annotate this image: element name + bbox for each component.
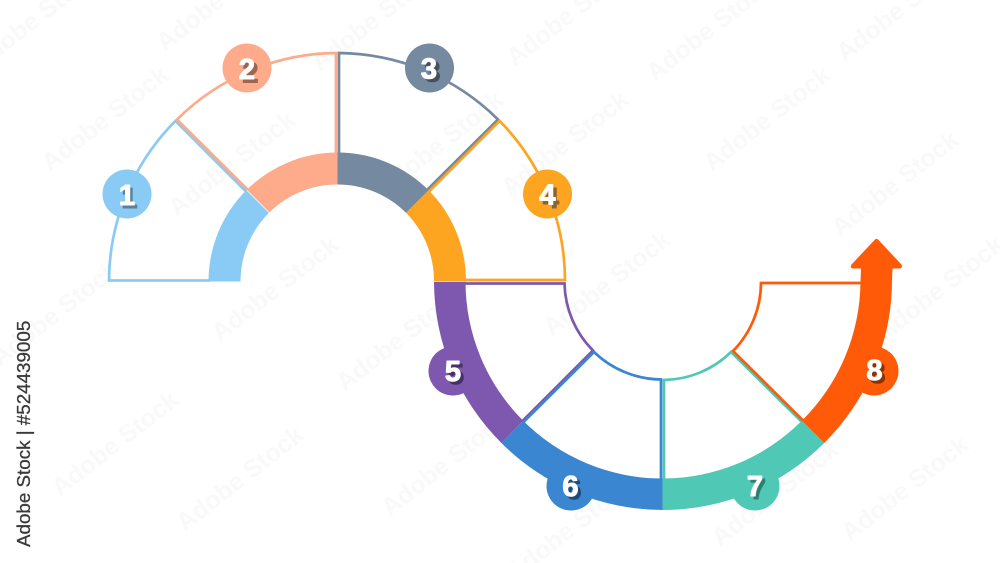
text: Adobe Stock (496, 86, 634, 202)
band segment 7 (662, 421, 824, 510)
band segment 3 (338, 152, 429, 213)
text: Adobe Stock (698, 61, 836, 177)
text: Adobe Stock (206, 231, 344, 347)
band segment 8 with arrow (802, 239, 902, 443)
badge 1: 1 (119, 180, 135, 212)
number 5: 5 (445, 356, 461, 388)
panel outline 1 (109, 121, 246, 281)
text: Adobe Stock (826, 126, 964, 242)
badge 1: 1 (121, 183, 138, 215)
badge 2 (222, 44, 272, 92)
number 6: 6 (562, 471, 579, 503)
text: Adobe Stock (376, 406, 514, 522)
number 8: 8 (866, 355, 883, 387)
text: Adobe Stock (36, 61, 174, 177)
text: Adobe Stock (171, 421, 309, 537)
band segment 4 (406, 190, 466, 282)
number 7: 7 (750, 474, 766, 506)
text: Adobe Stock (706, 436, 844, 552)
badge 4: 4 (539, 180, 556, 212)
stock id text: Adobe Stock | #524439005 (13, 321, 34, 547)
text: Adobe Stock (836, 431, 974, 547)
text: Adobe Stock (538, 226, 676, 342)
band segment 5 (434, 282, 523, 443)
badge 4: 4 (543, 183, 559, 215)
band segment 1 (208, 190, 269, 282)
text: Adobe Stock (163, 106, 301, 222)
text: Adobe Stock (331, 281, 469, 397)
band segment 6 (501, 421, 662, 510)
number 5: 5 (448, 359, 464, 391)
panel outline 4 (429, 121, 565, 280)
panel outline 6 (524, 352, 661, 480)
panel outline 7 (664, 352, 802, 480)
badge 2: 2 (242, 58, 259, 90)
panel outline 8 (733, 283, 864, 421)
number 6: 6 (565, 474, 582, 506)
number 8: 8 (869, 358, 886, 390)
badge 4 (523, 170, 572, 218)
text: Adobe Stock (46, 386, 184, 502)
text: Adobe Stock (371, 86, 509, 202)
panel outline 2 (177, 53, 336, 190)
badge circles 5 to 8 behind the band (428, 346, 898, 510)
badge 3: 3 (424, 56, 441, 88)
badge 2: 2 (239, 54, 255, 86)
badge 1 (102, 170, 152, 218)
band segment 2 (247, 152, 338, 212)
number 7: 7 (747, 471, 763, 503)
panel outline 3 (339, 53, 498, 190)
badge 3: 3 (421, 54, 437, 86)
badge 3 (405, 44, 454, 92)
panel outline 5 (464, 284, 593, 422)
